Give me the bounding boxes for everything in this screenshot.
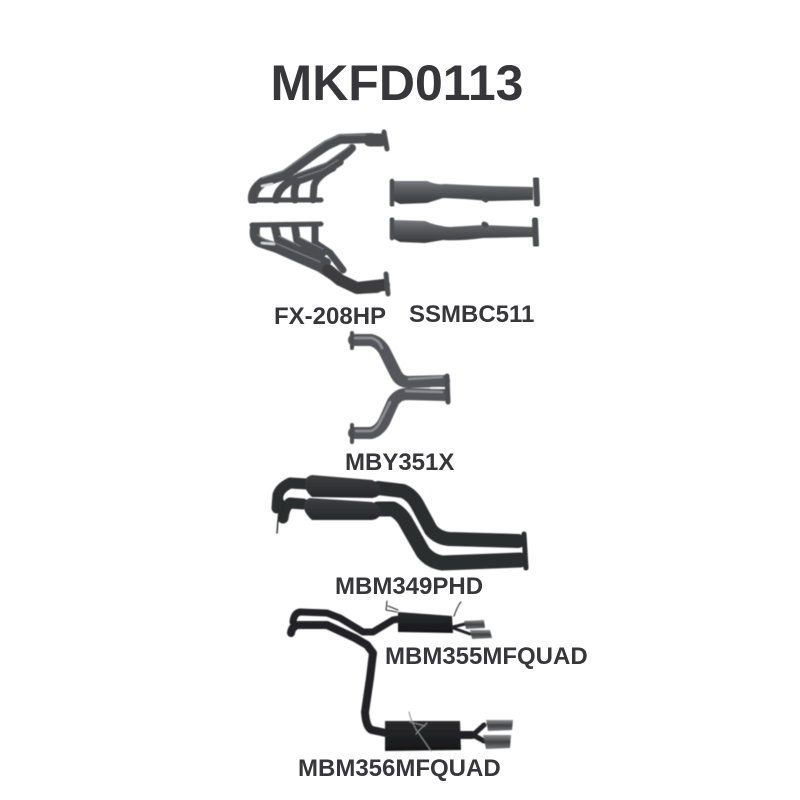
label: FX-208HP: FX-208HP — [274, 303, 386, 330]
icon: SSMBC511 lower pipe — [392, 219, 536, 245]
icon: MBM356MFQUAD rear muffler — [291, 625, 513, 751]
label: SSMBC511: SSMBC511 — [409, 301, 534, 328]
icon: FX-208HP upper header — [252, 132, 387, 200]
icon: FX-208HP lower header — [252, 224, 388, 294]
label: MBM355MFQUAD: MBM355MFQUAD — [385, 643, 588, 670]
icon: MBM355MFQUAD rear muffler — [293, 601, 492, 639]
icon: MBM349PHD twin mufflers — [277, 475, 526, 568]
label: MBY351X: MBY351X — [345, 449, 454, 476]
icon: SSMBC511 upper pipe — [392, 179, 537, 205]
label: MBM349PHD: MBM349PHD — [335, 573, 483, 600]
icon: MBY351X Y-pipe — [352, 333, 448, 442]
label: MBM356MFQUAD: MBM356MFQUAD — [298, 755, 501, 782]
title: MKFD0113 — [271, 55, 523, 111]
